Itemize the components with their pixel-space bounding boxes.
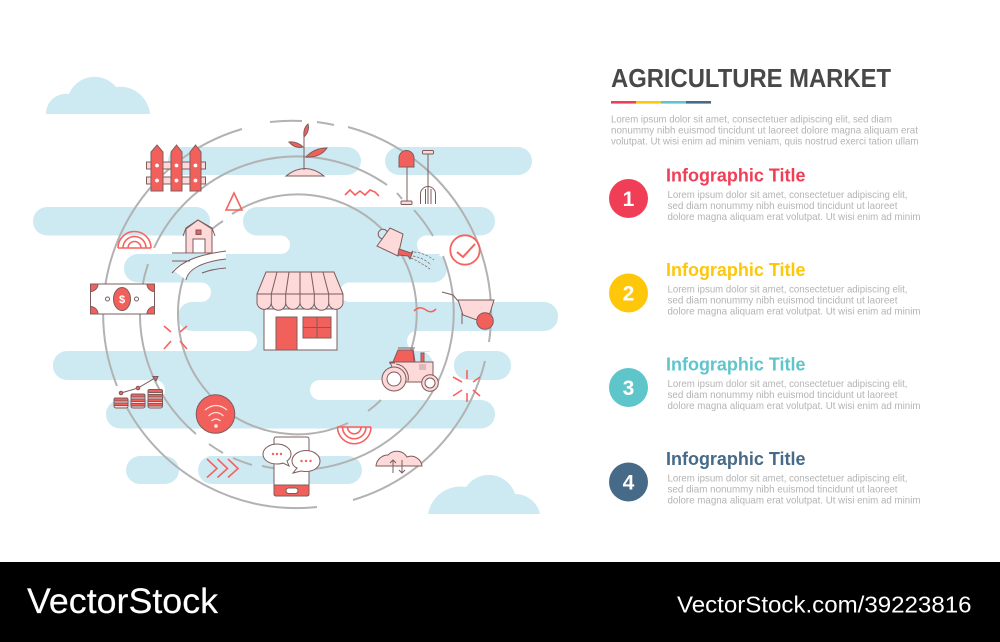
item 1 text: Lorem ipsum dolor sit amet, consectetuer adipiscing elit, — [668, 189, 908, 201]
icon: fence — [146, 145, 206, 191]
icon: shovel — [399, 150, 414, 204]
title: AGRICULTURE MARKET — [611, 63, 891, 93]
item 2 heading: Infographic Title — [666, 259, 806, 280]
intro text block: volutpat. Ut wisi enim ad minim veniam, quis nostrud exerci tation ullam — [611, 135, 919, 147]
item 4 text: sed diam nonummy nibh euismod tincidunt ut laoreet — [668, 483, 898, 495]
item 4 — [609, 448, 921, 506]
item 3 text: Lorem ipsum dolor sit amet, consectetuer adipiscing elit, — [668, 378, 908, 390]
number badge 3: 3 — [623, 377, 634, 400]
icon: sparkle accent left — [164, 326, 187, 349]
item 4 text — [668, 472, 921, 506]
item 3 text — [668, 378, 921, 412]
item 3 — [609, 354, 921, 412]
item 1 text — [668, 189, 921, 223]
item 4 text: Lorem ipsum dolor sit amet, consectetuer adipiscing elit, — [668, 472, 908, 484]
title colour rule — [611, 101, 711, 104]
item 3 text: sed diam nonummy nibh euismod tincidunt ut laoreet — [668, 389, 898, 401]
icon: inverted rainbow accent — [338, 427, 371, 444]
icon: squiggle accent — [414, 308, 436, 312]
item 2 text: dolore magna aliquam erat volutpat. Ut wisi enim ad minim — [668, 305, 921, 317]
icon: pitchfork — [420, 150, 436, 204]
icon: banknote: $ — [119, 294, 125, 306]
number badge 4 — [609, 462, 648, 502]
icon: banknote — [90, 284, 154, 314]
number badge 2: 2 — [623, 282, 634, 306]
icon: wifi badge — [196, 395, 235, 433]
footer image reference: VectorStock.com/39223816 — [677, 592, 972, 618]
number badge 3 — [609, 368, 648, 407]
icon: sprout — [286, 124, 327, 176]
icon: coin stacks with growth line — [114, 376, 162, 408]
item 1 text: dolore magna aliquam erat volutpat. Ut wisi enim ad minim — [668, 211, 921, 223]
icon: watering can — [377, 228, 434, 269]
icon: rainbow accent — [118, 232, 151, 248]
number badge 2 — [609, 274, 648, 312]
item 2 — [609, 259, 921, 317]
item 2 text: sed diam nonummy nibh euismod tincidunt ut laoreet — [668, 294, 898, 306]
number badge 4: 4 — [623, 472, 635, 494]
icon: barn — [172, 220, 226, 280]
icon: cloud with up and down arrows — [376, 451, 422, 473]
intro text block: nonummy nibh euismod tincidunt ut laoreet dolore magna aliquam erat — [611, 124, 918, 136]
item 4 text: dolore magna aliquam erat volutpat. Ut wisi enim ad minim — [668, 494, 921, 506]
number badge 1 — [609, 179, 648, 218]
item 1 — [609, 164, 921, 223]
icon: sparkle accent right — [453, 370, 480, 402]
footer bar — [0, 562, 1000, 642]
item 4 heading: Infographic Title — [666, 448, 806, 469]
icon: storefront — [257, 272, 343, 350]
item 3 text: dolore magna aliquam erat volutpat. Ut wisi enim ad minim — [668, 400, 921, 412]
item 1 heading: Infographic Title — [666, 164, 806, 186]
item 3 heading: Infographic Title — [666, 354, 806, 374]
icon: check mark badge — [450, 235, 480, 265]
intro text block — [611, 113, 919, 147]
item 1 text: sed diam nonummy nibh euismod tincidunt ut laoreet — [668, 200, 898, 212]
intro text block: Lorem ipsum dolor sit amet, consectetuer adipiscing elit, sed diam — [611, 113, 892, 125]
icon: smartphone with chat bubbles — [263, 437, 320, 496]
footer logo: VectorStock — [27, 582, 219, 621]
icon: tractor — [382, 348, 438, 391]
icon: triangle accent — [226, 193, 242, 210]
item 2 text — [668, 283, 921, 317]
icon: zigzag accent — [345, 190, 379, 196]
icon: wheelbarrow — [442, 292, 494, 329]
number badge 1: 1 — [623, 188, 635, 211]
icon: chevrons accent — [207, 459, 238, 478]
item 2 text: Lorem ipsum dolor sit amet, consectetuer adipiscing elit, — [668, 283, 908, 295]
background: cloud-band shapes — [0, 77, 607, 514]
segmented concentric rings — [103, 121, 491, 508]
